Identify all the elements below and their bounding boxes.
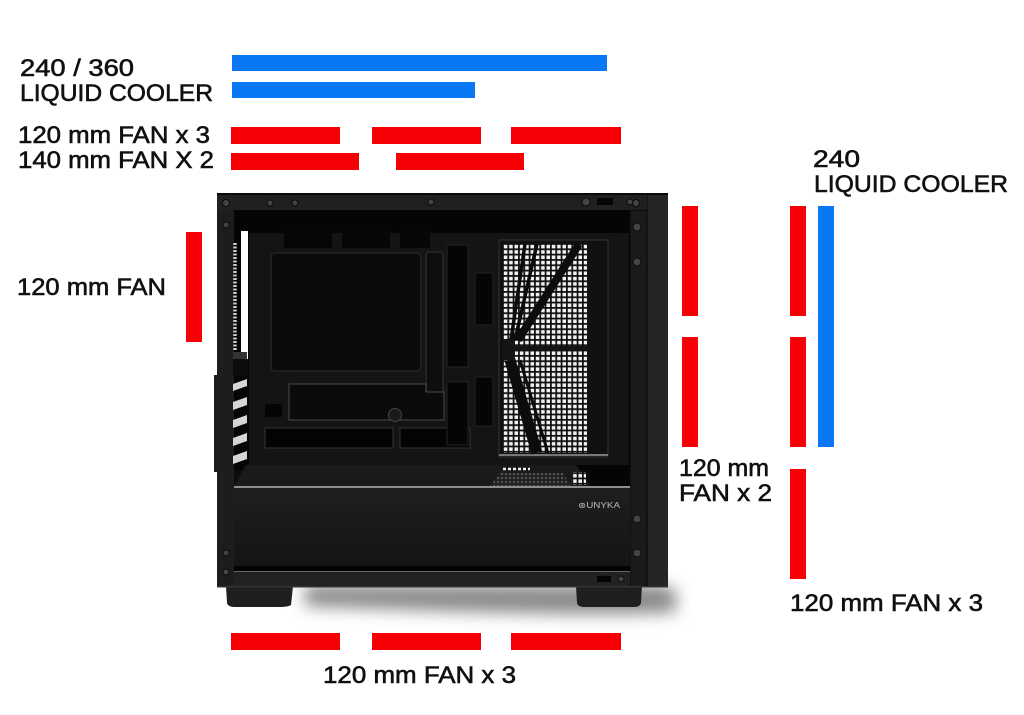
blue bars: top liquid cooler xyxy=(232,55,607,98)
label: 240 / 360 liquid cooler: LIQUID COOLER xyxy=(20,80,213,107)
top rail xyxy=(217,193,647,210)
white rear opening xyxy=(241,231,248,359)
front panel side xyxy=(647,193,668,587)
logo: ⊛UNYKA xyxy=(578,501,621,510)
case body xyxy=(217,193,648,587)
interior xyxy=(234,210,630,470)
label: 140 mm fan x 2: 140 mm FAN X 2 xyxy=(18,147,214,174)
lower cutout xyxy=(289,384,444,420)
label: 120 mm fan x 3 right: 120 mm FAN x 3 xyxy=(790,590,983,617)
rear frame xyxy=(217,210,234,587)
case shadow xyxy=(305,585,676,614)
label: 240 / 360 liquid cooler: 240 / 360 xyxy=(20,55,134,82)
label: 240 liquid cooler: 240 xyxy=(813,146,860,173)
label: 120 mm fan x 3 top: 120 mm FAN x 3 xyxy=(18,122,210,149)
pc case xyxy=(214,193,676,614)
label: 120 mm fan x 3 bottom: 120 mm FAN x 3 xyxy=(323,662,516,689)
feet xyxy=(226,586,642,607)
cpu cutout xyxy=(271,253,421,371)
psu shroud top xyxy=(234,465,590,486)
bottom rail xyxy=(234,571,630,587)
blue bar: front liquid cooler xyxy=(818,206,834,447)
red bars: top fans 120 mm xyxy=(231,127,621,144)
red bars: bottom fans xyxy=(231,633,621,650)
red bars: front fans 120 mm x 2 xyxy=(682,206,698,447)
side cutouts xyxy=(447,245,493,445)
label: 240 liquid cooler: LIQUID COOLER xyxy=(814,171,1008,198)
red bars: top fans 140 mm xyxy=(231,153,524,170)
mesh panel xyxy=(499,240,608,457)
psu shroud xyxy=(234,488,630,566)
label: 120 mm fan x 2 xyxy=(679,455,772,507)
label: 240 / 360 liquid cooler xyxy=(20,55,213,107)
label: 120 mm fan x 2: FAN x 2 xyxy=(679,480,772,507)
motherboard tray xyxy=(249,233,629,465)
red bar: rear fan xyxy=(186,232,202,342)
expansion slots xyxy=(233,379,247,464)
red bars: front fans 120 mm x 3 xyxy=(790,206,806,579)
label: 120 mm fan x 2: 120 mm xyxy=(679,455,769,482)
screws xyxy=(222,198,641,582)
label: 240 liquid cooler xyxy=(813,146,1008,198)
label: 120 mm fan rear: 120 mm FAN xyxy=(17,274,166,301)
